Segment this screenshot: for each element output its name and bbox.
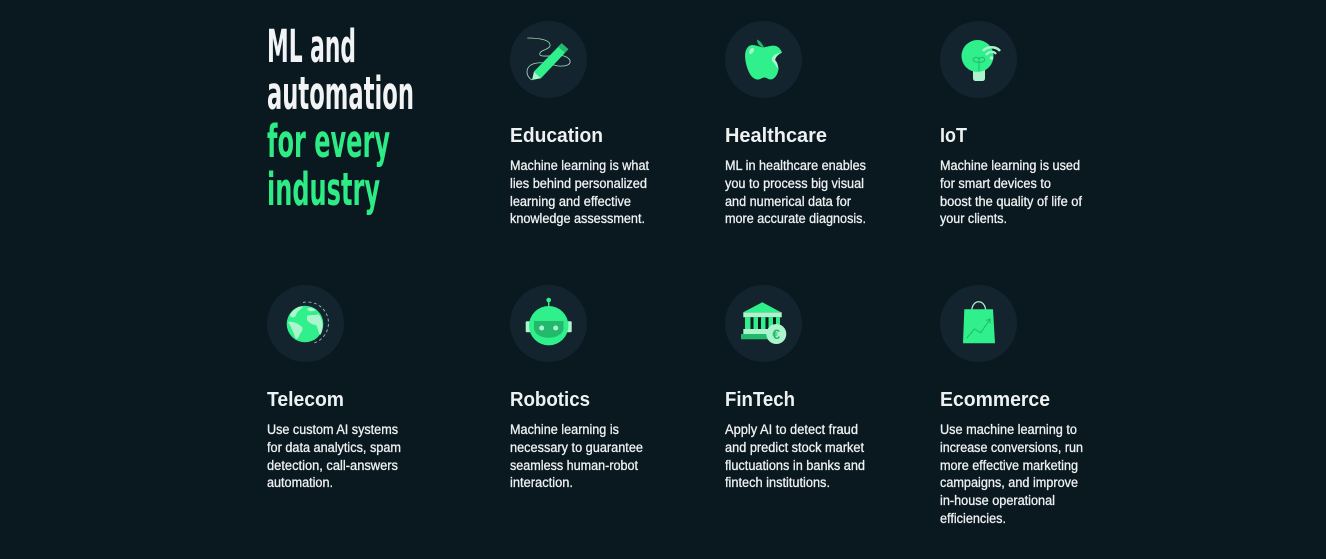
text: Education description: knowledge assessment.: [510, 211, 645, 226]
text: Healthcare description: ML in healthcare enables: [725, 158, 866, 173]
text: Healthcare description: and numerical data for: [725, 194, 852, 209]
text: Ecommerce description: increase conversions, run: [940, 440, 1083, 455]
text: Healthcare description: [725, 158, 866, 226]
text: Robotics description: interaction.: [510, 475, 573, 490]
title: ML and: [267, 20, 356, 73]
text: Telecom description: [267, 422, 401, 490]
icon: bank with euro coin: €: [772, 326, 780, 342]
panel: fintech: [725, 285, 865, 490]
title: automation: [267, 67, 414, 120]
title: [267, 20, 414, 216]
panel: ecommerce: [940, 285, 1083, 526]
heading: Ecommerce: Ecommerce: [940, 389, 1050, 411]
text: FinTech description: fluctuations in banks and: [725, 458, 865, 473]
text: Ecommerce description: campaigns, and improve: [940, 475, 1078, 490]
heading: Robotics: Robotics: [510, 389, 590, 411]
text: Education description: [510, 158, 649, 226]
heading: Healthcare: Healthcare: [725, 125, 827, 147]
panel: healthcare: [725, 21, 866, 226]
icon: shopping bag with chart: [940, 285, 1017, 362]
text: Ecommerce description: [940, 422, 1083, 526]
panel: IoT: [940, 21, 1082, 226]
title: industry: [267, 163, 380, 216]
panel: robotics: [510, 285, 643, 490]
title: for every: [267, 115, 390, 168]
text: IoT description: your clients.: [940, 211, 1007, 226]
text: Telecom description: detection, call-answers: [267, 458, 398, 473]
text: IoT description: boost the quality of life of: [940, 194, 1082, 209]
heading: FinTech: FinTech: [725, 389, 795, 411]
text: Telecom description: automation.: [267, 475, 333, 490]
text: Ecommerce description: in-house operational: [940, 493, 1055, 508]
icon: pencil: [510, 21, 587, 98]
icon: apple: [725, 21, 802, 98]
text: FinTech description: and predict stock market: [725, 440, 864, 455]
icon: robot: [510, 285, 587, 362]
panel: telecom: [267, 285, 401, 490]
heading: IoT: IoT: [940, 125, 967, 147]
text: Robotics description: seamless human-robot: [510, 458, 638, 473]
text: Healthcare description: more accurate diagnosis.: [725, 211, 866, 226]
text: Telecom description: Use custom AI systems: [267, 422, 398, 437]
text: FinTech description: Apply AI to detect fraud: [725, 422, 858, 437]
text: Education description: learning and effective: [510, 194, 631, 209]
heading: Education: Education: [510, 125, 603, 147]
panel: education: [510, 21, 649, 226]
text: IoT description: [940, 158, 1082, 226]
text: Telecom description: for data analytics, spam: [267, 440, 401, 455]
text: Ecommerce description: more effective marketing: [940, 458, 1078, 473]
text: IoT description: Machine learning is used: [940, 158, 1080, 173]
text: Robotics description: Machine learning is: [510, 422, 619, 437]
icon: smart bulb: [940, 21, 1017, 98]
text: Healthcare description: you to process big visual: [725, 176, 864, 191]
icon: bank with euro coin: [725, 285, 802, 362]
text: FinTech description: [725, 422, 865, 490]
text: Ecommerce description: Use machine learning to: [940, 422, 1077, 437]
heading: Telecom: Telecom: [267, 389, 344, 411]
icon: globe: [267, 285, 344, 362]
text: Robotics description: necessary to guarantee: [510, 440, 643, 455]
text: Education description: lies behind personalized: [510, 176, 647, 191]
text: IoT description: for smart devices to: [940, 176, 1051, 191]
text: Robotics description: [510, 422, 643, 490]
text: Education description: Machine learning is what: [510, 158, 649, 173]
text: FinTech description: fintech institutions.: [725, 475, 830, 490]
text: Ecommerce description: efficiencies.: [940, 511, 1006, 526]
